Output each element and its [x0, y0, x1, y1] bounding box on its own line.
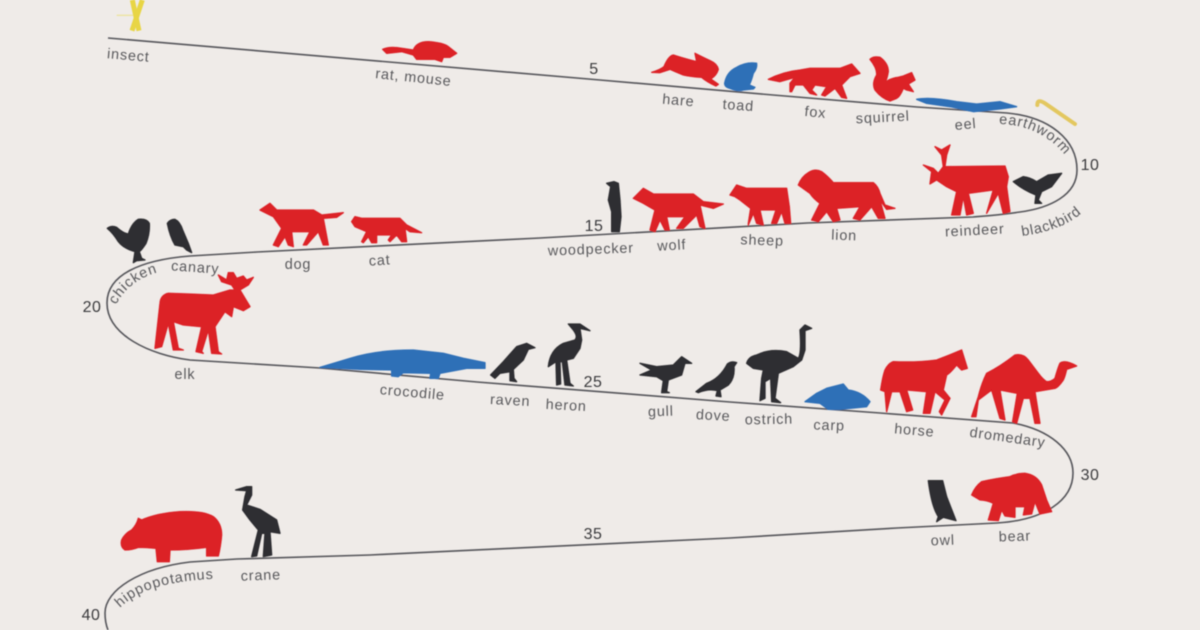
label: cat: cat	[368, 252, 391, 270]
label: horse: horse	[894, 421, 935, 441]
icon: eel	[917, 98, 1017, 112]
icon: elk	[155, 273, 253, 354]
icon: squirrel	[870, 57, 915, 101]
icon: hare	[652, 53, 718, 86]
label: eel: eel	[954, 116, 977, 134]
icon: sheep	[730, 185, 791, 225]
icon: earthworm	[1037, 101, 1075, 124]
label: ostrich: ostrich	[745, 412, 793, 428]
label: owl: owl	[931, 533, 955, 549]
icon: dog	[260, 203, 343, 247]
icon: cat	[352, 217, 422, 243]
timeline curve	[105, 38, 1077, 630]
label: squirrel: squirrel	[855, 109, 910, 127]
number 5: 5	[589, 61, 599, 78]
icon: blackbird	[1013, 173, 1062, 203]
icon: fox	[768, 64, 860, 98]
icon: bear	[972, 473, 1052, 521]
label: crocodile: crocodile	[379, 382, 446, 404]
label: canary: canary	[171, 258, 220, 278]
label: fox: fox	[804, 104, 827, 122]
icon: carp	[805, 384, 870, 409]
label: insect: insect	[106, 46, 150, 66]
number 25: 25	[584, 374, 602, 391]
label: woodpecker: woodpecker	[547, 241, 634, 260]
number 10: 10	[1081, 157, 1099, 174]
label: blackbird: blackbird	[1020, 206, 1081, 236]
label: heron: heron	[545, 397, 587, 415]
label: carp: carp	[813, 417, 845, 435]
label: crane: crane	[240, 567, 281, 585]
icon: lion	[798, 170, 895, 222]
label: raven: raven	[490, 392, 531, 410]
label: bear: bear	[998, 528, 1031, 546]
icon: dromedary	[972, 355, 1077, 423]
icon: hippopotamus	[121, 512, 222, 562]
label: lion: lion	[831, 228, 857, 244]
icon: crocodile	[320, 350, 485, 378]
label: dove: dove	[696, 407, 731, 425]
label: dromedary: dromedary	[969, 425, 1047, 451]
icon: dove	[696, 362, 737, 397]
icon: crane	[236, 487, 280, 557]
label: reindeer: reindeer	[945, 221, 1005, 241]
label: chicken: chicken	[110, 265, 157, 304]
icon: rat, mouse	[383, 42, 457, 62]
label: rat, mouse: rat, mouse	[375, 66, 452, 90]
label: wolf: wolf	[656, 237, 687, 255]
number 35: 35	[584, 526, 602, 543]
label: toad: toad	[722, 97, 755, 115]
icon: raven	[491, 343, 535, 382]
icon: chicken	[107, 219, 149, 263]
icon: horse	[881, 350, 967, 415]
label: elk: elk	[175, 367, 195, 383]
icon: woodpecker	[607, 182, 621, 232]
label: earthworm: earthworm	[999, 116, 1070, 154]
number 30: 30	[1081, 467, 1099, 484]
icon: gull	[640, 357, 692, 393]
icon: insect	[117, 0, 142, 31]
number 20: 20	[83, 299, 101, 316]
icon: reindeer	[923, 145, 1010, 215]
label: dog: dog	[285, 257, 311, 273]
number 40: 40	[82, 607, 100, 624]
icon: toad	[725, 63, 757, 91]
icon: heron	[548, 324, 590, 386]
label: gull: gull	[648, 404, 674, 420]
number 15: 15	[585, 218, 603, 235]
label: hare: hare	[662, 92, 695, 110]
icon: canary	[167, 219, 192, 253]
label: hippopotamus: hippopotamus	[113, 570, 213, 608]
icon: owl	[928, 481, 956, 522]
icon: wolf	[633, 188, 723, 232]
icon: ostrich	[747, 325, 812, 403]
label: sheep: sheep	[740, 232, 784, 250]
